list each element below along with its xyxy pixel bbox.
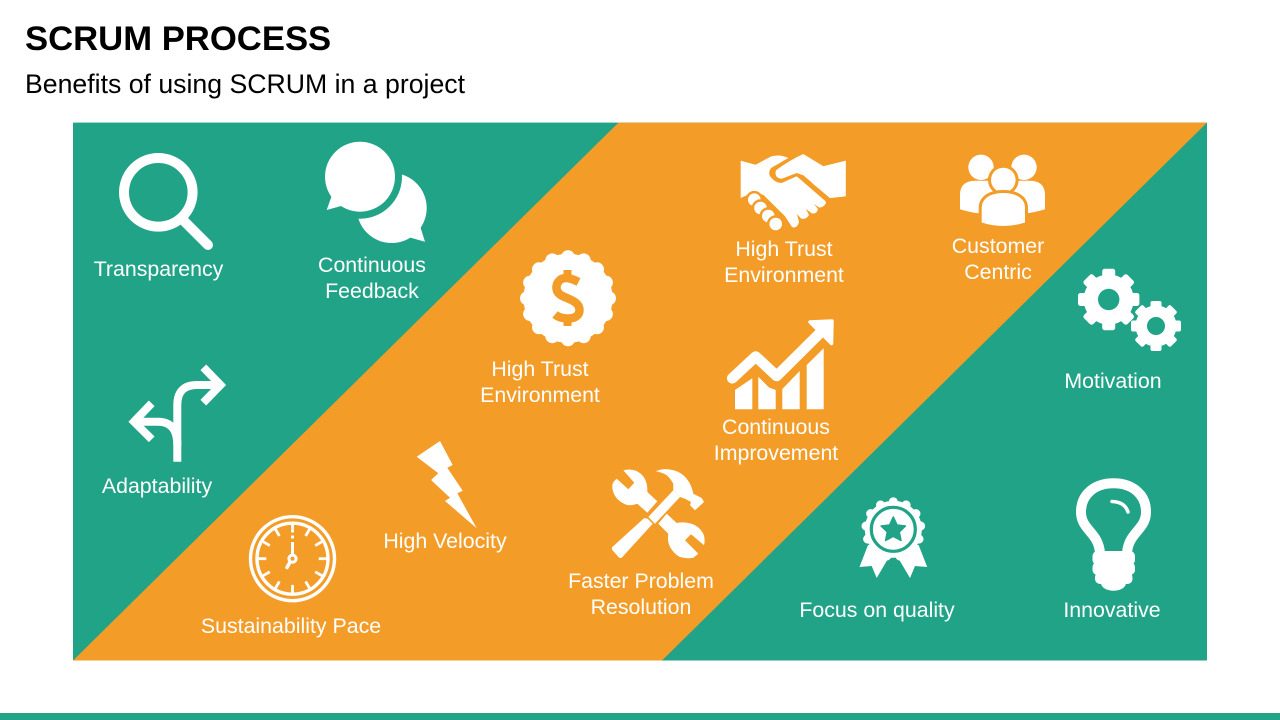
label: High Velocity: High Velocity [383,529,507,553]
label: High Trust Environment (left): Environment [480,383,600,407]
icon: speech bubbles [318,135,427,243]
icon: light bulb [1081,483,1146,591]
label: Sustainability Pace: Sustainability Pace [201,614,381,638]
icon: quality ribbon [860,497,927,578]
icon: handshake [741,154,846,230]
label: Transparency: Transparency [94,257,224,281]
label: High Trust Environment (left): High Trust [491,357,589,381]
label: Continuous Improvement: Continuous [722,415,830,439]
icon: customer group [960,155,1045,226]
label: Faster Problem Resolution: Faster Problem [568,569,714,593]
icon: clock [250,517,334,601]
icon: magnifying glass [124,158,208,245]
panel: orange diagonal band [73,123,1207,661]
label: High Trust Environment (top): Environment [724,263,844,287]
label: Customer Centric: Centric [964,260,1032,284]
icon: dollar badge [520,250,616,346]
label: Motivation: Motivation [1064,369,1162,393]
label: Customer Centric: Customer [952,234,1044,258]
label: Innovative: Innovative [1063,598,1161,622]
label: Adaptability: Adaptability [102,474,212,498]
label: Focus on quality: Focus on quality [799,598,955,622]
icon: hammer and wrench [612,469,705,558]
icon: gears [1078,269,1181,351]
label: Faster Problem Resolution: Resolution [591,595,691,619]
icon: branching arrows [134,367,220,462]
panel: green background [73,123,1207,661]
icon: growth chart [732,321,832,409]
subtitle: Benefits of using SCRUM in a project [25,69,466,99]
footer bar [0,713,1280,720]
label: Continuous Feedback: Continuous [318,253,426,277]
icon: lightning bolt [417,441,477,528]
label: Continuous Improvement: Improvement [714,441,838,465]
label: Continuous Feedback: Feedback [325,279,419,303]
title: SCRUM PROCESS [25,20,331,58]
label: High Trust Environment (top): High Trust [735,237,833,261]
